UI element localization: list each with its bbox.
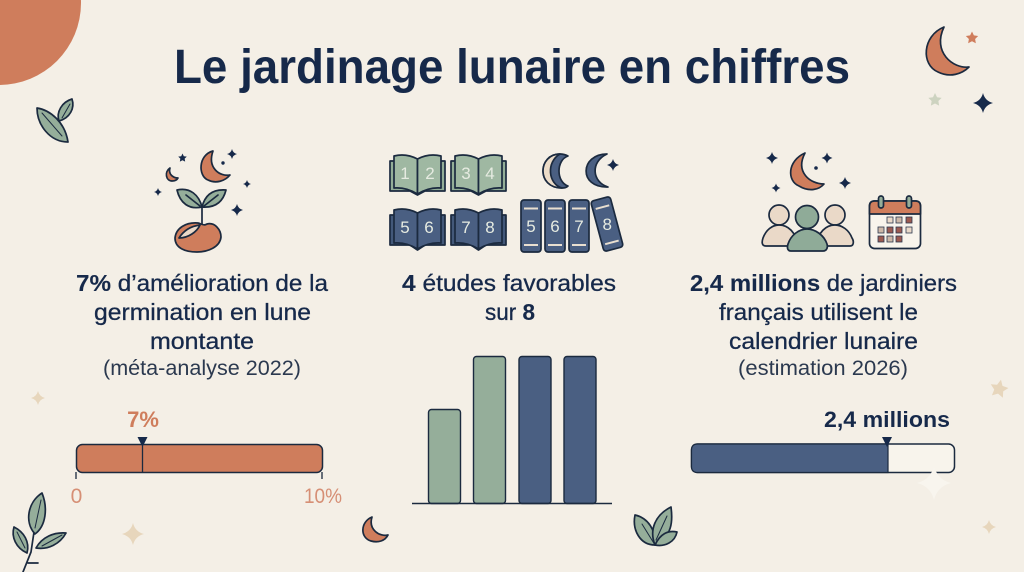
icon: book spines 5 to 8: 8	[603, 215, 612, 234]
text: germination statistic	[76, 270, 328, 380]
gauge: 7 percent: 0	[71, 485, 82, 508]
gauge: 7 percent: 7%	[127, 407, 159, 432]
icon: open books 1 to 4: 1	[400, 164, 410, 183]
text: studies statistic	[402, 270, 616, 325]
bar chart: 4 of 8 studies	[412, 356, 612, 504]
gauge: 7 percent: 10%	[304, 485, 342, 508]
icon: calendar	[870, 196, 920, 248]
text: gardeners statistic: français utilisent le	[719, 299, 918, 325]
icon: book spines 5 to 8: 6	[550, 217, 560, 236]
text: gardeners statistic: calendrier lunaire	[729, 328, 918, 354]
icon: bottom-centre leaves	[634, 507, 677, 545]
icon: open books 5 to 8: 7	[461, 218, 471, 237]
text: gardeners statistic	[690, 270, 957, 380]
icon: book spines 5 to 8: 7	[574, 217, 584, 236]
decorative white sparkle	[917, 466, 951, 500]
gauge: 7 percent	[71, 407, 342, 508]
title: Le jardinage lunaire en chiffres	[174, 41, 850, 94]
icon: open books 1 to 4: 4	[485, 164, 495, 183]
text: germination statistic: germination en lune	[94, 299, 311, 325]
icon: three people	[762, 205, 853, 251]
icon: open books 5 to 8: 5	[400, 218, 410, 237]
icon: bottom moon	[363, 517, 388, 542]
text: gardeners statistic: 2,4 millions de jardiniers	[690, 270, 957, 296]
icon: open books 5 to 8	[390, 209, 506, 250]
panel: gardeners	[690, 152, 957, 472]
icon: open books 5 to 8: 6	[424, 218, 434, 237]
text: studies statistic: 4 études favorables	[402, 270, 616, 296]
gauge: 2.4 million: 2,4 millions	[824, 407, 950, 432]
icon: top-right moon and stars	[926, 27, 993, 113]
icon: open books 1 to 4: 3	[461, 164, 471, 183]
decorative beige stars	[31, 378, 1010, 545]
icon: open books 5 to 8: 8	[485, 218, 495, 237]
icon: open books 1 to 4	[390, 155, 506, 195]
icon: two moons	[543, 154, 619, 188]
text: studies statistic: sur 8	[485, 299, 535, 325]
gauge: 2.4 million	[692, 407, 954, 472]
icon: book spines 5 to 8	[521, 196, 623, 252]
panel: studies	[390, 154, 623, 504]
icon: book spines 5 to 8: 5	[526, 217, 536, 236]
text: germination statistic: 7% d’amélioration de la	[76, 270, 328, 296]
icon: moon and stars	[766, 152, 851, 192]
text: germination statistic: (méta-analyse 2022)	[103, 357, 301, 380]
decorative coral circle	[0, 0, 81, 85]
text: gardeners statistic: (estimation 2026)	[738, 357, 908, 380]
icon: seedling, moons and stars	[154, 149, 251, 252]
icon: open books 1 to 4: 2	[425, 164, 435, 183]
icon: top-left leaves	[37, 99, 73, 142]
icon: bottom-left branch	[13, 493, 66, 572]
text: germination statistic: montante	[150, 328, 254, 354]
panel: germination	[71, 149, 342, 508]
